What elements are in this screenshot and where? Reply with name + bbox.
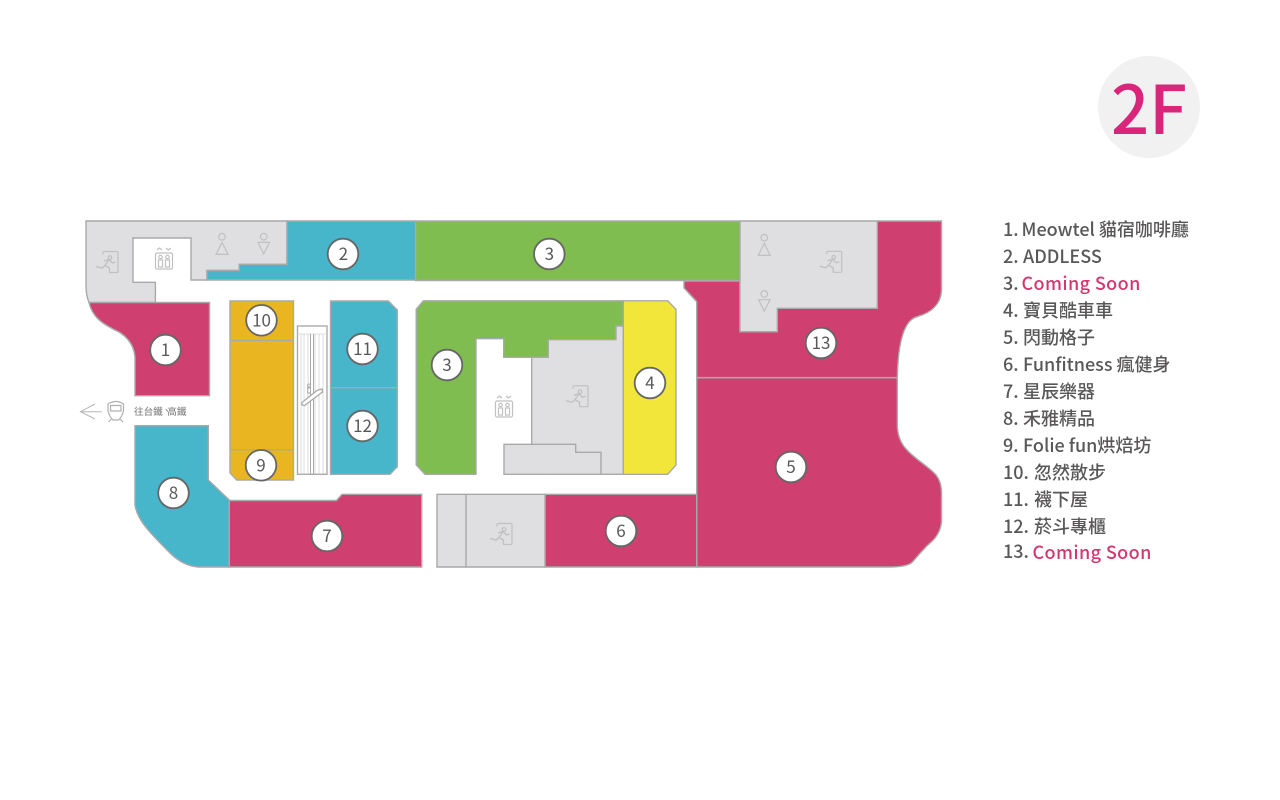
legend item 7: 7. bbox=[1003, 378, 1019, 404]
legend: shop list bbox=[1003, 216, 1189, 565]
shop marker 8 bbox=[158, 478, 189, 508]
icon: elevator centre bbox=[496, 396, 512, 417]
shop marker 6 bbox=[606, 516, 636, 546]
escalator bbox=[298, 326, 327, 474]
shop marker 10 bbox=[246, 305, 277, 336]
legend item 8: 禾雅精品 bbox=[1023, 405, 1095, 431]
railway direction label bbox=[134, 403, 187, 418]
shop marker 6: 6 bbox=[616, 517, 626, 542]
shop 7 area bbox=[229, 494, 422, 567]
legend item 3: Coming Soon bbox=[1022, 270, 1141, 296]
direction arrow to railway bbox=[80, 404, 102, 419]
shop marker 7 bbox=[312, 521, 342, 551]
shop marker 11 bbox=[347, 334, 378, 364]
shop marker 11: 11 bbox=[353, 335, 372, 360]
shop 3 top area bbox=[416, 221, 740, 280]
shop marker 4 bbox=[635, 368, 665, 398]
shop marker 12: 12 bbox=[353, 412, 372, 437]
shop marker 9 bbox=[246, 450, 276, 481]
legend item 9: 9. bbox=[1003, 432, 1019, 458]
shop marker 7: 7 bbox=[322, 522, 332, 547]
legend item 1: 1. bbox=[1003, 216, 1019, 242]
icon: female toilet right bbox=[758, 234, 770, 255]
shop 2 area bbox=[207, 221, 416, 280]
icon: male toilet left bbox=[258, 233, 269, 254]
shop marker 9: 9 bbox=[256, 451, 266, 476]
railway direction label: 、 bbox=[162, 403, 172, 417]
legend item 2: ADDLESS bbox=[1023, 243, 1102, 269]
shop marker 4: 4 bbox=[645, 369, 655, 394]
legend item 3: 3. bbox=[1003, 270, 1019, 296]
shop marker 3 top: 3 bbox=[545, 240, 554, 265]
shop marker 12 bbox=[347, 411, 378, 441]
icon: exit bottom bbox=[490, 524, 512, 544]
service area: top left bbox=[86, 221, 287, 302]
legend item 11: 襪下屋 bbox=[1034, 486, 1088, 512]
shop marker 13: 13 bbox=[812, 329, 830, 354]
legend item 1: Meowtel 貓宿咖啡廳 bbox=[1022, 216, 1189, 242]
legend item 10: 忽然散步 bbox=[1034, 459, 1106, 485]
shop marker 3 lower: 3 bbox=[442, 351, 452, 376]
legend item 13: Coming Soon bbox=[1032, 539, 1152, 565]
legend item 10 bbox=[1003, 459, 1106, 485]
legend item 11: 11. bbox=[1003, 486, 1029, 512]
legend item 12: 菸斗專櫃 bbox=[1034, 513, 1106, 539]
service area: top right bbox=[740, 221, 877, 332]
legend item 7: 星辰樂器 bbox=[1023, 378, 1095, 404]
shop marker 1: 1 bbox=[161, 336, 170, 361]
service block: centre lower bbox=[504, 444, 601, 474]
icon: female toilet left bbox=[216, 233, 228, 254]
service area: centre bbox=[532, 326, 623, 474]
legend item 12: 12. bbox=[1003, 513, 1029, 539]
legend item 2: 2. bbox=[1003, 243, 1019, 269]
icon: male toilet right bbox=[759, 291, 770, 311]
legend item 5: 閃動格子 bbox=[1023, 324, 1095, 350]
railway direction label: 往台鐵 bbox=[134, 404, 163, 418]
icon: train bbox=[108, 402, 124, 422]
shop 1 area bbox=[89, 302, 210, 396]
icon: exit top right bbox=[820, 251, 842, 272]
floor badge: 2F: 2F bbox=[1111, 57, 1187, 154]
shop marker 2: 2 bbox=[339, 240, 348, 265]
legend item 9: Folie fun烘焙坊 bbox=[1023, 432, 1151, 458]
legend item 12 bbox=[1003, 513, 1106, 539]
shop 13 area bbox=[684, 221, 942, 378]
shop marker 10: 10 bbox=[252, 306, 271, 331]
shop marker 8: 8 bbox=[169, 479, 178, 504]
shop 5 area bbox=[697, 378, 942, 567]
legend item 4: 4. bbox=[1003, 297, 1019, 323]
floor plan bbox=[80, 221, 942, 567]
shop 8 area bbox=[135, 426, 229, 567]
service area: bottom bbox=[437, 494, 545, 567]
legend item 4: 寶貝酷車車 bbox=[1023, 297, 1113, 323]
railway direction label: 高鐵 bbox=[167, 404, 187, 418]
legend item 5: 5. bbox=[1003, 324, 1019, 350]
shop marker 5 bbox=[776, 452, 806, 482]
shop marker 13 bbox=[806, 328, 836, 358]
shop 4 area bbox=[623, 301, 676, 474]
shop marker 2 bbox=[328, 239, 358, 269]
legend item 10: 10. bbox=[1003, 459, 1029, 485]
shop marker 3 lower bbox=[432, 350, 462, 380]
shop marker 3 top bbox=[534, 239, 565, 269]
shop marker 5: 5 bbox=[786, 453, 796, 478]
legend item 13: 13. bbox=[1003, 538, 1029, 564]
legend item 6: 6. bbox=[1003, 351, 1019, 377]
legend item 11 bbox=[1003, 486, 1088, 512]
icon: elevator top left bbox=[156, 248, 172, 269]
shop 3 lower area bbox=[416, 301, 623, 474]
icon: exit centre bbox=[566, 386, 588, 407]
shops 11 and 12 area bbox=[330, 301, 397, 474]
legend item 8: 8. bbox=[1003, 405, 1019, 431]
shops 9 and 10 area bbox=[230, 301, 294, 480]
icon: exit top left bbox=[96, 252, 118, 272]
shop marker 1 bbox=[150, 335, 181, 365]
shop 6 area bbox=[545, 494, 697, 567]
legend item 6: Funfitness 瘋健身 bbox=[1023, 351, 1171, 377]
